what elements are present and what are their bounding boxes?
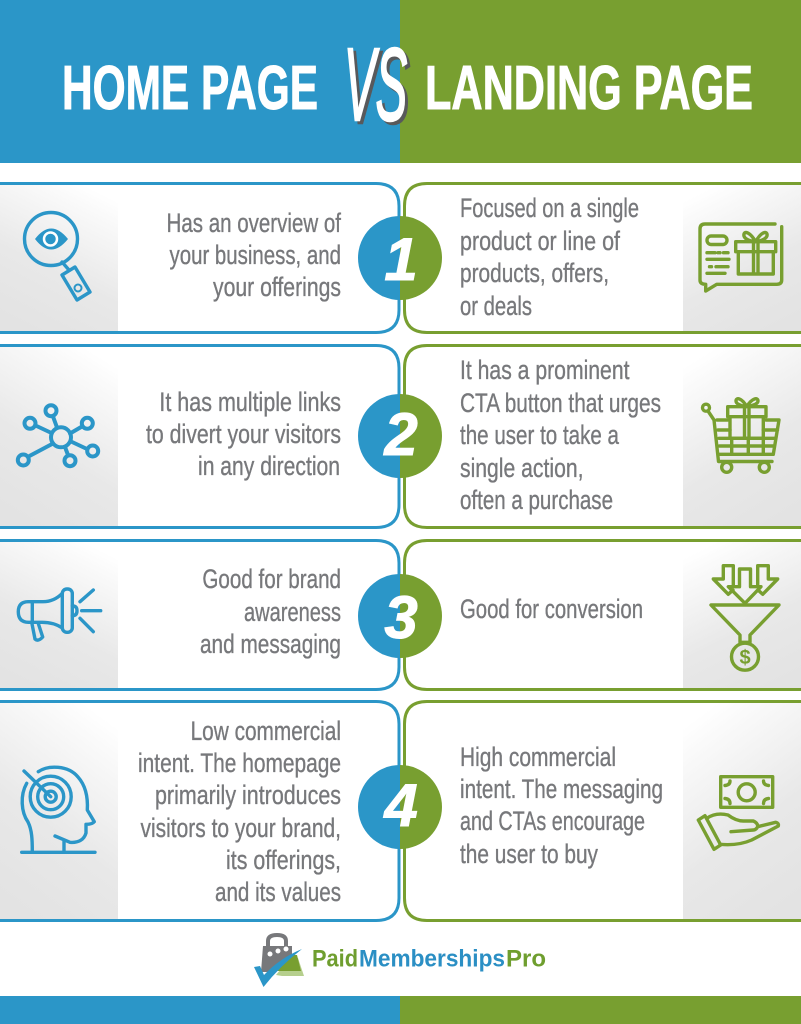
text: home page point 4: primarily introduces [155,780,341,810]
number badge 1 [358,216,442,300]
icon: funnel with arrows and dollar coin: $ [739,647,751,669]
text: landing page point 3: Good for conversion [460,594,643,624]
text: home page point 4: its offerings, [226,845,341,875]
logo wordmark: Paid [312,946,358,973]
title: vs: VS [347,29,410,145]
text: landing page point 4 [460,742,663,869]
number badge 3 [358,574,442,658]
row 4 [0,702,801,920]
text: home page point 4: visitors to your brand, [140,813,341,843]
text: home page point 4: and its values [215,877,341,907]
text: home page point 1: Has an overview of [166,208,341,238]
text: home page point 2: to divert your visitors [146,419,341,449]
text: home page point 2: It has multiple links [159,387,341,417]
number badge 2 [358,394,442,478]
number badge 1: 1 [384,226,418,293]
text: home page point 4 [138,716,341,907]
text: landing page point 4: High commercial [460,742,616,772]
icon: funnel with arrows and dollar coin [711,566,779,670]
row 2 [0,346,801,528]
icon: megaphone [18,589,101,640]
text: home page point 3: awareness [244,597,341,627]
text: landing page point 2 [460,355,661,515]
text: landing page point 1 [460,193,639,321]
text: landing page point 2: the user to take a [460,420,620,450]
panel: home page row 4 [0,702,399,920]
text: home page point 1: your offerings [213,272,341,302]
text: home page point 2 [146,387,341,481]
number badge 4 [358,765,442,849]
icon: shopping cart with gift [702,399,779,472]
text: home page point 4: intent. The homepage [138,748,341,778]
text: landing page point 2: often a purchase [460,485,613,515]
panel: landing page row 1 [404,184,801,332]
text: landing page point 2: It has a prominent [460,355,630,385]
text: landing page point 1: product or line of [460,226,620,256]
panel: home page row 2 [0,346,399,528]
text: landing page point 1: Focused on a single [460,193,639,223]
panel: landing page row 4 [404,702,801,920]
text: landing page point 2: CTA button that urges [460,388,661,418]
number badge 2: 2 [383,401,418,468]
icon: hand holding money [698,777,778,849]
text: home page point 3: Good for brand [202,564,341,594]
panel: home page row 1 [0,184,399,332]
text: home page point 1: your business, and [170,240,341,270]
text: home page point 1 [166,208,341,302]
text: landing page point 4: the user to buy [460,839,598,869]
panel: landing page row 3 [404,540,801,690]
logo: Paid Memberships Pro [254,935,546,987]
row 3 [0,540,801,690]
text: home page point 2: in any direction [198,451,340,481]
row 1 [0,184,801,332]
title: home page: HOME PAGE [62,54,318,123]
logo wordmark: Pro [506,946,546,973]
panel: home page row 3 [0,540,399,690]
number badge 4: 4 [383,772,418,839]
icon: padlock, papers and check mark [254,935,304,987]
icon: magnifier with eye [24,212,90,300]
text: landing page point 2: single action, [460,453,584,483]
text: home page point 4: Low commercial [191,716,341,746]
text: landing page point 4: intent. The messaging [460,774,663,804]
text: landing page point 1: or deals [460,291,532,321]
logo wordmark: Memberships [359,946,505,973]
text: landing page point 1: products, offers, [460,258,609,288]
header banner [0,0,801,163]
panel: landing page row 2 [404,346,801,528]
icon: network nodes [18,405,98,466]
title: vs: VS [344,26,407,142]
footer band [0,996,801,1024]
text: landing page point 4: and CTAs encourage [460,806,645,836]
text: home page point 3 [200,564,341,659]
text: home page point 3: and messaging [200,629,341,659]
icon: chat bubble with gift [700,224,782,291]
number badge 3: 3 [384,584,418,651]
icon: head with target [22,767,95,852]
logo wordmark [312,946,546,973]
